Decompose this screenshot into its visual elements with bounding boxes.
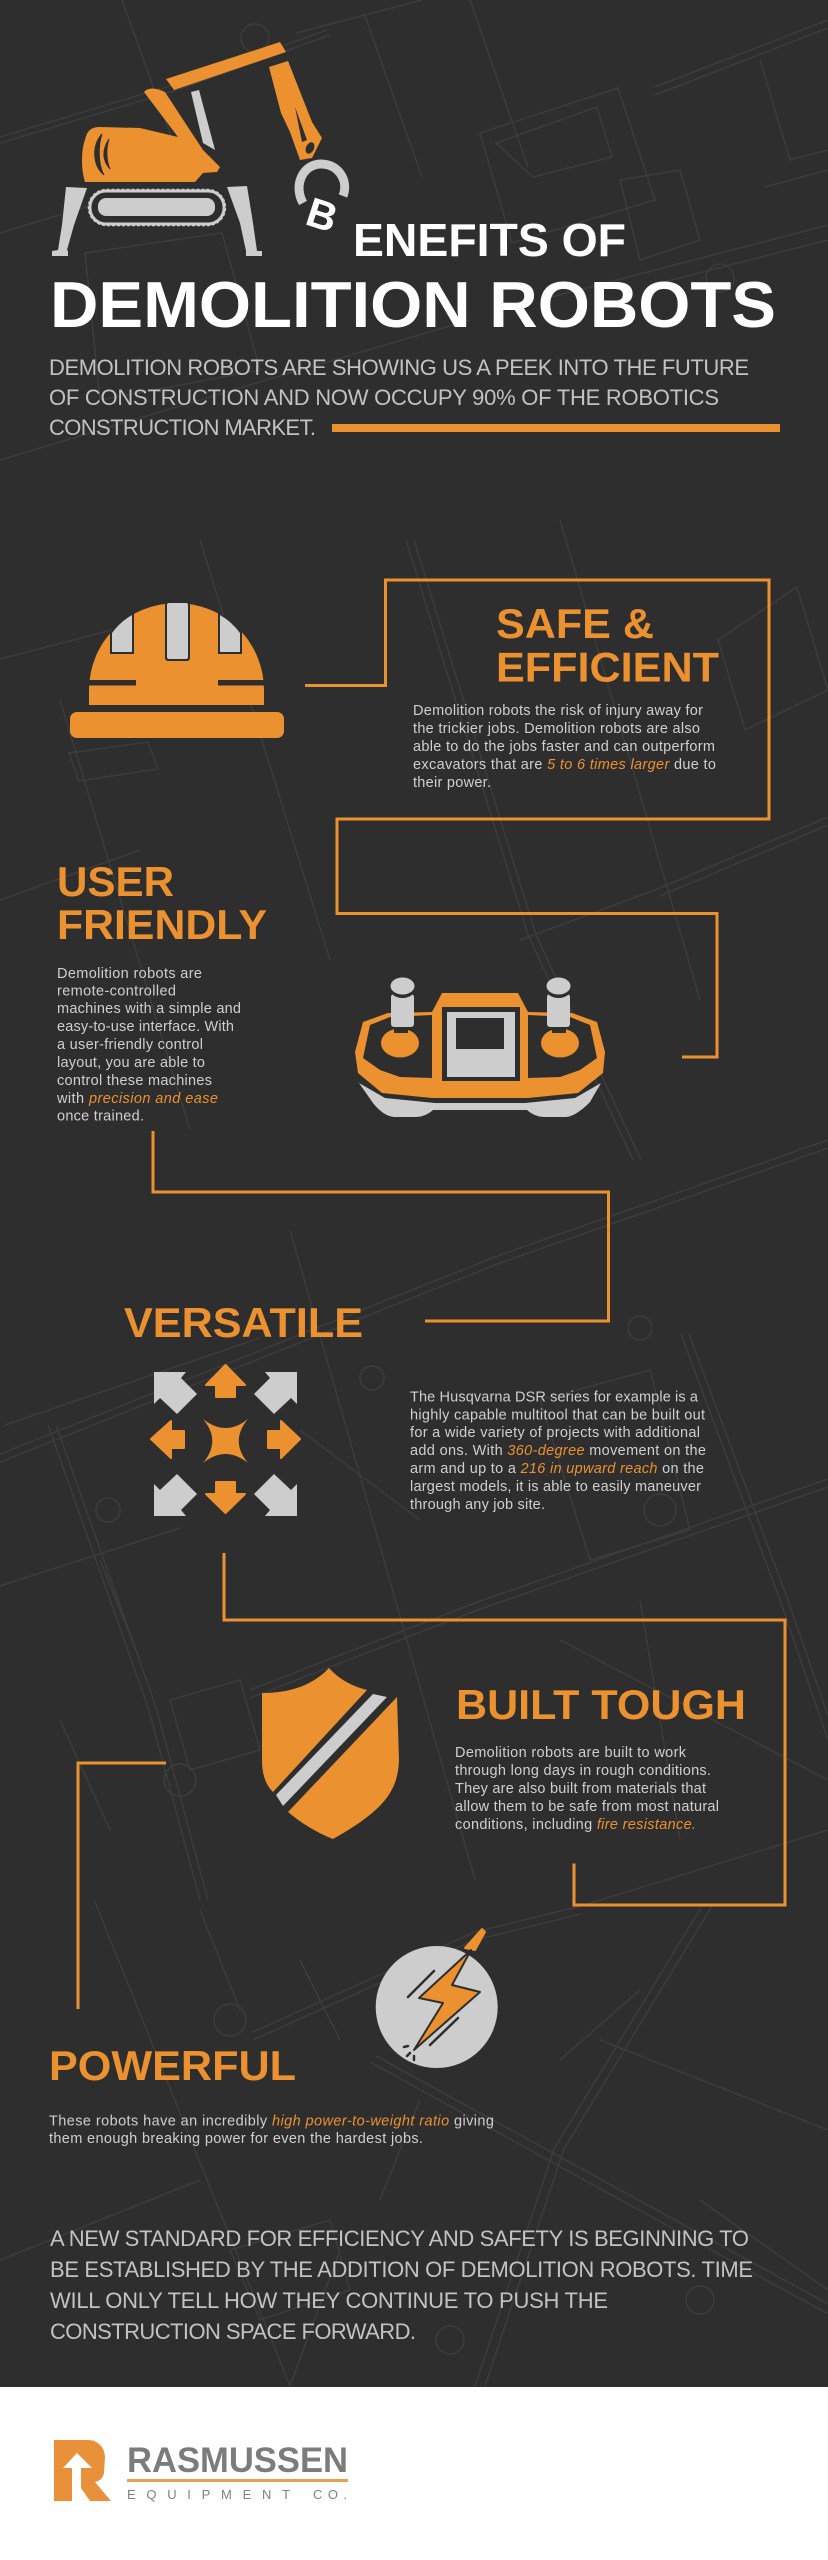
title: benefits of — [301, 189, 626, 266]
footer — [0, 2387, 828, 2560]
heading: POWERFUL — [49, 2042, 296, 2089]
panel: user friendly — [56, 858, 605, 1124]
heading: BUILT TOUGH — [456, 1681, 746, 1728]
logo: rasmussen — [54, 2440, 348, 2502]
body text: Demolition robots are — [57, 966, 202, 982]
heading: EFFICIENT — [496, 644, 719, 690]
heading — [496, 600, 719, 690]
closing text — [50, 2226, 753, 2344]
panel: powerful — [49, 1929, 498, 2147]
heading — [57, 858, 267, 948]
header: title and intro — [49, 42, 780, 440]
body text: for a wide variety of projects with additional — [410, 1425, 700, 1441]
body text: largest models, it is able to easily maneuver — [410, 1479, 701, 1495]
connector: built tough to powerful — [78, 1763, 166, 2009]
panel: versatile — [124, 1299, 706, 1516]
body text: allow them to be safe from most natural — [455, 1799, 719, 1815]
body text — [413, 703, 716, 791]
connector: user friendly to versatile — [153, 1131, 608, 1321]
body text: Demolition robots the risk of injury away for — [413, 703, 703, 719]
intro rule — [332, 424, 780, 432]
intro text: DEMOLITION ROBOTS ARE SHOWING US A PEEK INTO THE FUTURE — [49, 355, 749, 380]
body text: through any job site. — [410, 1497, 545, 1513]
body text: highly capable multitool that can be built out — [410, 1408, 705, 1424]
closing text: CONSTRUCTION SPACE FORWARD. — [50, 2319, 416, 2344]
title: benefits of: B — [301, 189, 343, 241]
body text: with precision and ease — [56, 1091, 218, 1107]
intro text — [49, 355, 749, 440]
body text: remote-controlled — [57, 984, 176, 1000]
body text — [49, 2114, 494, 2147]
body text: machines with a simple and — [57, 1001, 241, 1017]
intro text: OF CONSTRUCTION AND NOW OCCUPY 90% OF THE ROBOTICS — [49, 385, 719, 410]
icon: lightning bolt — [376, 1929, 498, 2068]
body text: add ons. With 360-degree movement on the — [410, 1443, 706, 1459]
closing text: A NEW STANDARD FOR EFFICIENCY AND SAFETY IS BEGINNING TO — [50, 2226, 749, 2251]
icon: remote control — [355, 978, 605, 1117]
body text: conditions, including fire resistance. — [455, 1817, 696, 1833]
heading: SAFE & — [496, 600, 654, 647]
body text — [56, 966, 241, 1124]
intro text: CONSTRUCTION MARKET. — [49, 415, 316, 440]
body text: control these machines — [57, 1073, 212, 1089]
logo: rasmussen: RASMUSSEN — [127, 2441, 348, 2480]
connector: versatile to built tough — [224, 1553, 785, 1905]
body text: arm and up to a 216 in upward reach on the — [410, 1461, 704, 1477]
panel: safe and efficient — [70, 600, 719, 791]
body text: These robots have an incredibly high power-to-weight ratio giving — [49, 2114, 494, 2130]
body text — [455, 1745, 719, 1833]
heading: VERSATILE — [124, 1299, 363, 1346]
icon: demolition robot — [52, 42, 345, 256]
body text: excavators that are 5 to 6 times larger due to — [413, 757, 716, 773]
body text: Demolition robots are built to work — [455, 1745, 687, 1761]
body text: through long days in rough conditions. — [455, 1763, 711, 1779]
logo: rasmussen: EQUIPMENT — [127, 2487, 290, 2502]
panel: built tough — [262, 1668, 746, 1839]
body text: once trained. — [57, 1108, 144, 1124]
heading: USER — [57, 858, 174, 905]
closing text: BE ESTABLISHED BY THE ADDITION OF DEMOLITION ROBOTS. TIME — [50, 2257, 753, 2282]
body text: able to do the jobs faster and can outperform — [413, 739, 715, 755]
body text: easy-to-use interface. With — [57, 1019, 234, 1035]
body text: The Husqvarna DSR series for example is a — [410, 1390, 699, 1406]
logo: rasmussen: CO. — [313, 2487, 347, 2502]
body text: their power. — [413, 775, 491, 791]
icon: shield — [262, 1668, 399, 1839]
body text: them enough breaking power for even the hardest jobs. — [49, 2131, 423, 2147]
icon: directional arrows — [151, 1365, 300, 1516]
title: demolition robots: DEMOLITION ROBOTS — [50, 268, 776, 341]
icon: hard hat — [70, 601, 284, 738]
heading: FRIENDLY — [57, 901, 267, 948]
body text: the trickier jobs. Demolition robots are also — [413, 721, 700, 737]
body text: They are also built from materials that — [455, 1781, 706, 1797]
body text: a user-friendly control — [57, 1037, 203, 1053]
closing text: WILL ONLY TELL HOW THEY CONTINUE TO PUSH THE — [50, 2288, 608, 2313]
connector: safe box to user friendly — [305, 580, 769, 1057]
body text: layout, you are able to — [57, 1055, 205, 1071]
title: benefits of: ENEFITS OF — [353, 214, 626, 266]
body text — [410, 1390, 706, 1513]
